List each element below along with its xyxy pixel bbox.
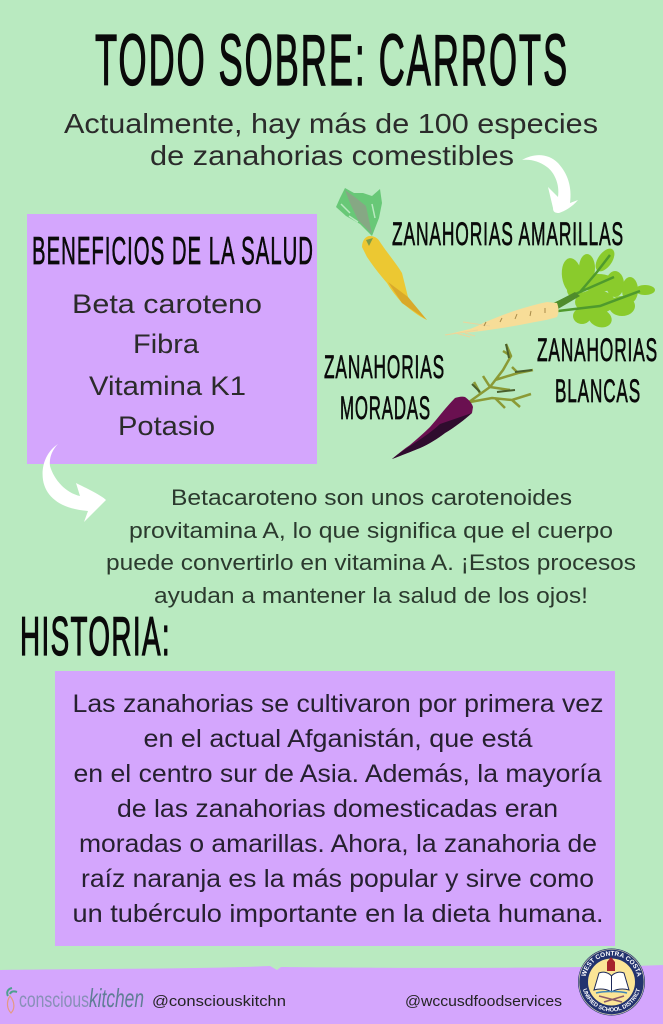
icon: purple carrot [392, 344, 533, 459]
label: zanahorias moradas: MORADAS [340, 390, 431, 426]
history text: en el centro sur de Asia. Además, la mayoría [74, 760, 602, 788]
handle: conscious kitchen: @consciouskitchn [152, 993, 286, 1010]
history text: moradas o amarillas. Ahora, la zanahoria de [79, 830, 597, 858]
label: zanahorias moradas: ZANAHORIAS [324, 349, 445, 385]
history text [72, 690, 604, 928]
arrow: to carrot varieties [522, 155, 578, 213]
benefits list: Potasio [118, 411, 215, 441]
panel: historia [55, 671, 615, 946]
history text: en el actual Afganistán, que está [144, 725, 533, 753]
icon: conscious kitchen carrot [7, 988, 17, 1013]
icon: white carrot [445, 245, 655, 337]
benefits list: Vitamina K1 [89, 371, 246, 401]
betacaroteno explanation: ayudan a mantener la salud de los ojos! [154, 583, 588, 608]
handle: wccusd food services: @wccusdfoodservices [405, 993, 562, 1010]
betacaroteno explanation: Betacaroteno son unos carotenoides [171, 485, 572, 510]
heading: historia: HISTORIA: [20, 605, 171, 667]
logo wordmark: kitchen [89, 983, 144, 1013]
footer band [0, 948, 663, 1024]
arrow: to betacaroteno text [43, 444, 106, 522]
panel heading: BENEFICIOS DE LA SALUD [32, 230, 314, 273]
icon: school district seal: UNIFIED SCHOOL DISTRICT [583, 988, 640, 1012]
label: zanahorias blancas [537, 332, 658, 409]
icon: yellow carrot [336, 188, 427, 320]
intro text: Actualmente, hay más de 100 especies [64, 108, 598, 139]
label: zanahorias moradas [324, 349, 445, 426]
icon: school district seal: WEST CONTRA COSTA [581, 950, 642, 977]
history text: de las zanahorias domesticadas eran [117, 795, 558, 823]
logo wordmark [19, 983, 144, 1013]
panel: beneficios de la salud [27, 214, 317, 464]
benefits list [72, 289, 262, 441]
icon: school district seal [578, 948, 645, 1016]
history text: raíz naranja es la más popular y sirve como [81, 865, 594, 893]
history text: Las zanahorias se cultivaron por primera vez [72, 690, 604, 718]
logo wordmark: conscious [19, 989, 89, 1012]
betacaroteno explanation: provitamina A, lo que significa que el cuerpo [129, 518, 613, 543]
betacaroteno explanation [106, 485, 636, 608]
intro text: de zanahorias comestibles [150, 140, 514, 171]
benefits list: Fibra [133, 329, 200, 359]
history text: un tubérculo importante en la dieta humana. [72, 900, 604, 928]
betacaroteno explanation: puede convertirlo en vitamina A. ¡Estos procesos [106, 550, 636, 575]
intro text [64, 108, 598, 171]
benefits list: Beta caroteno [72, 289, 262, 319]
